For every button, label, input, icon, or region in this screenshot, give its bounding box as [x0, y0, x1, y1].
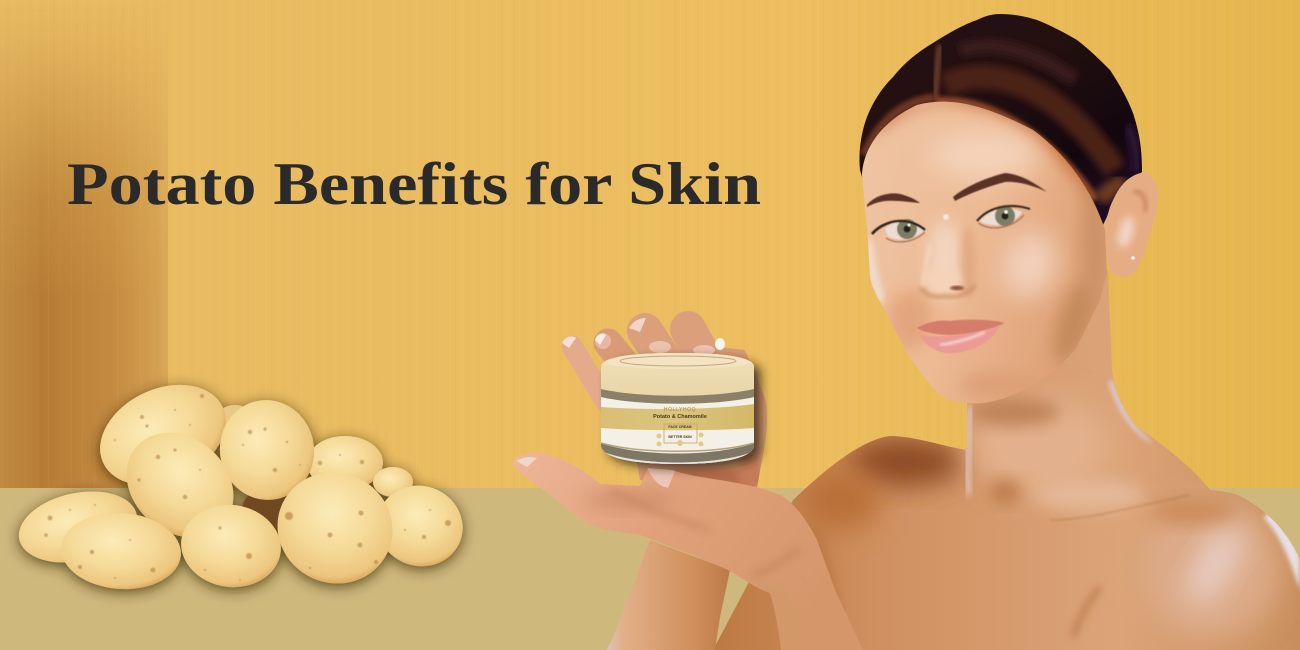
woman: left eye: [872, 219, 925, 242]
woman: forearm: [607, 540, 730, 650]
jar: label brand text: Potato & Chamomile: [653, 414, 707, 420]
jar: cap: [600, 352, 756, 398]
woman: nose: [920, 214, 975, 297]
woman: [505, 10, 1300, 650]
title: Potato Benefits for Skin: [67, 151, 761, 217]
jar: label seals: [656, 432, 704, 446]
jar: label frame: [664, 424, 697, 443]
jar: label brand text: FACE CREAM: [668, 425, 692, 429]
jar: white label: [601, 397, 754, 453]
jar: gold label band: [601, 404, 754, 430]
woman: left eyebrow: [867, 193, 920, 207]
jar: label brand text: BETTER SKIN: [668, 435, 692, 439]
woman: back of hand and fingers: [562, 318, 767, 495]
woman: face: [862, 102, 1107, 404]
jar: label brand text: HOLLYHOQ: [664, 407, 696, 413]
woman: right eye: [977, 206, 1030, 228]
jar: base: [601, 443, 754, 465]
woman: torso and shoulders: [700, 270, 1300, 650]
background wall: [0, 0, 1300, 488]
product jar: [600, 352, 756, 465]
jar: glass band: [601, 389, 754, 406]
jar: label brand text: [653, 407, 707, 439]
background table surface: [0, 488, 1300, 650]
woman: hair: [855, 10, 1150, 230]
woman: ear: [1103, 173, 1158, 277]
background left brown band: [0, 0, 168, 488]
woman: right eyebrow: [953, 173, 1047, 201]
woman: palm, thumb and wrist: [505, 445, 870, 650]
woman: lips: [917, 320, 1005, 353]
potato pile: [12, 365, 474, 602]
